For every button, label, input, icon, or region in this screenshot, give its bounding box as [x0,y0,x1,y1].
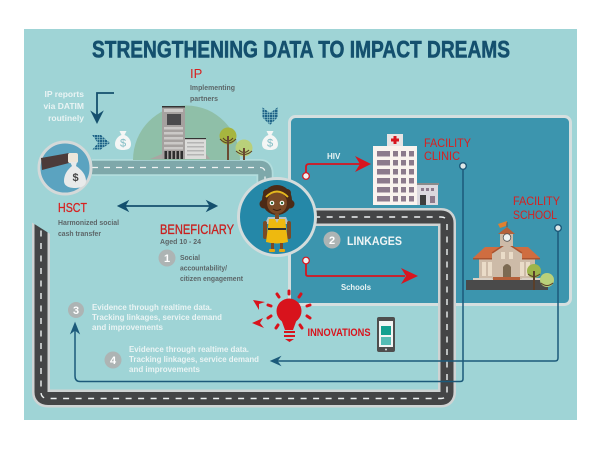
IP reports text: via DATIM [44,101,84,111]
step 3: Evidence through realtime data. [92,302,212,312]
step 1: accountability/ [180,264,228,272]
HSCT label: cash transfer [58,229,101,238]
beneficiary circle with character [238,178,316,256]
HSCT label: HSCT [58,200,87,215]
IP building illustration [133,106,252,160]
icon: light bulb [252,291,310,342]
HIV arrow: HIV [327,152,341,161]
step 4: Tracking linkages, service demand [129,354,259,364]
innovations label: INNOVATIONS [308,327,370,339]
step 4: Evidence through realtime data. [129,344,249,354]
icon: money bag right [262,131,278,150]
icon: money bag left [115,131,131,150]
icon: pixel chevron right [92,135,110,150]
step 1: citizen engagement [180,274,243,283]
facility clinic label: CLINIC [424,149,460,163]
IP reports text [44,89,84,123]
step 4 [104,344,259,374]
step 2 linkages: LINKAGES [347,234,402,248]
icon: down arrow [92,93,114,122]
facility school label: SCHOOL [513,208,557,222]
HIV arrow [303,152,371,179]
HSCT label [58,200,119,238]
IP reports text: routinely [48,113,84,123]
beneficiary label: Aged 10 - 24 [160,237,202,246]
step 1: Social [180,253,200,262]
step 3: and improvements [92,322,163,332]
step 3: Tracking linkages, service demand [92,312,222,322]
icon: phone [377,317,395,352]
icon: HSCT hand with bag: $ [72,172,79,184]
beneficiary label [160,222,234,246]
IP reports text: IP reports [44,89,84,99]
clinic connector line [71,163,466,382]
schools arrow [303,257,418,292]
main road [28,212,447,398]
facility clinic label [424,136,471,163]
facility school label: FACILITY [513,194,560,208]
step 2 linkages [324,232,402,248]
HSCT label: Harmonized social [58,218,119,227]
icon: HSCT hand with bag [39,142,91,194]
facility clinic label: FACILITY [424,136,471,150]
icon: school [466,221,554,290]
icon: pixel chevron down [262,107,278,125]
IP label: IP [190,66,202,81]
double arrow [118,201,217,211]
IP label [190,66,235,103]
step 1: 1 [164,253,170,265]
IP label: Implementing [190,83,235,92]
step 2 linkages: 2 [329,235,335,247]
step 3 [68,302,222,332]
icon: clinic [373,134,439,205]
light road [92,168,265,190]
schools arrow: Schools [341,283,372,292]
panel: linkages [290,116,570,304]
step 4: and improvements [129,364,200,374]
step 4: 4 [110,355,117,367]
facility school label [513,194,560,222]
IP label: partners [190,94,218,103]
step 3: 3 [73,305,79,317]
step 1 [158,250,243,283]
school connector line [271,225,561,365]
beneficiary label: BENEFICIARY [160,222,234,237]
